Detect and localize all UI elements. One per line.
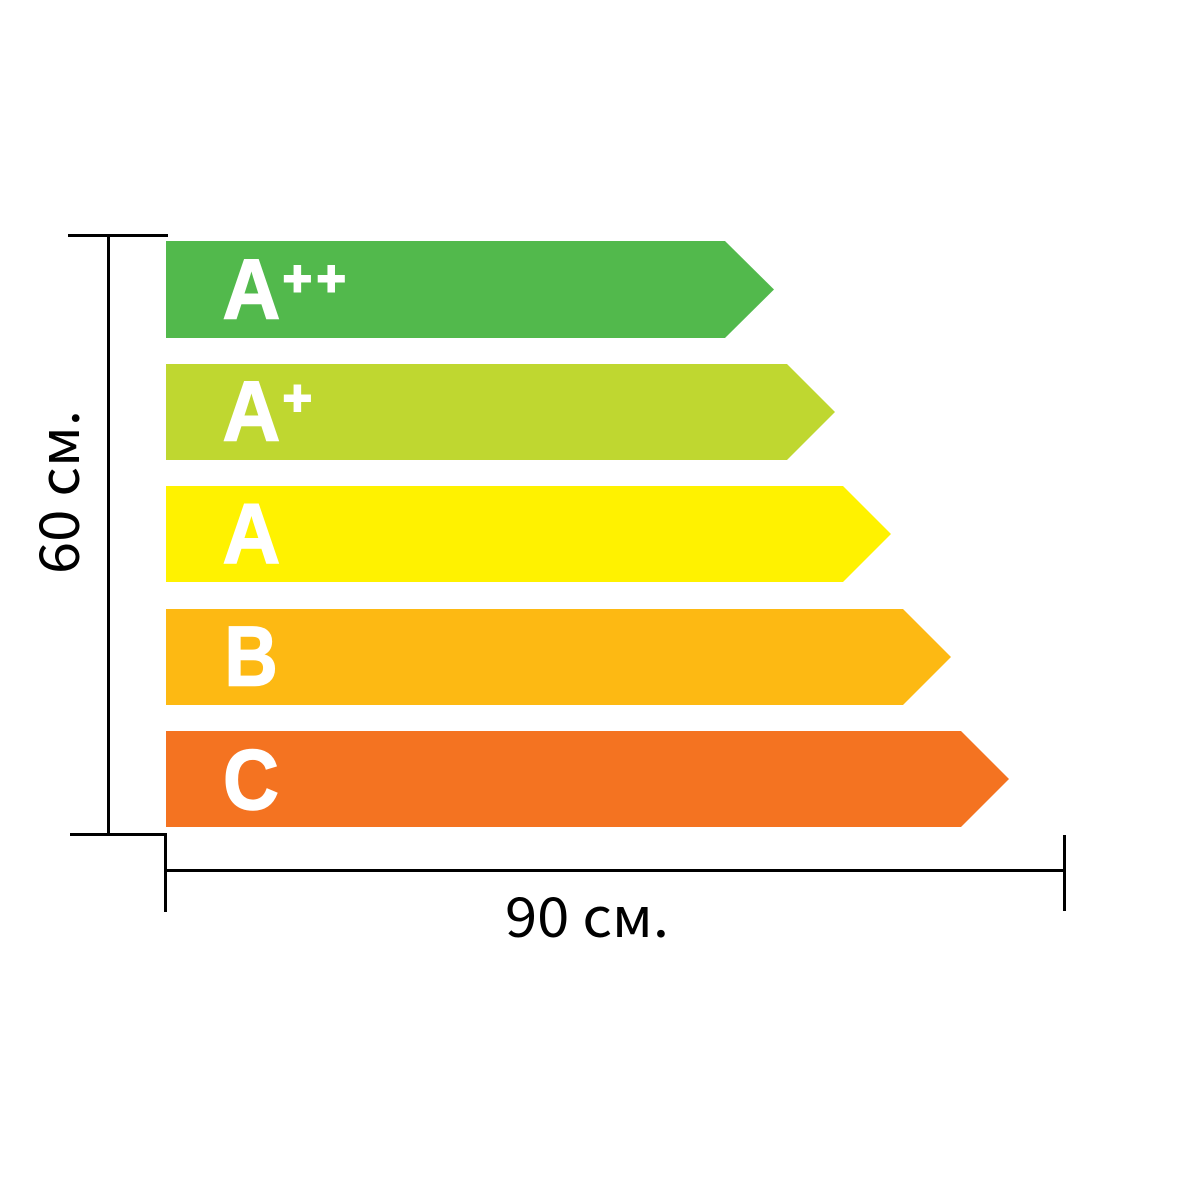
height label: 60 см.	[15, 410, 95, 574]
arrow bar: C	[166, 731, 1009, 828]
arrow bar: A+: +	[283, 370, 312, 426]
arrow bar: A: A	[222, 485, 280, 582]
arrow bar: A+	[166, 363, 835, 460]
arrow bar: A	[166, 485, 891, 582]
arrow bar: A++	[166, 241, 774, 338]
arrow bar: B: B	[224, 608, 278, 704]
width dimension line	[165, 834, 1065, 912]
height dimension line	[68, 235, 168, 834]
arrow bar: C: C	[223, 732, 279, 828]
arrow bar: A++: A	[222, 241, 280, 337]
arrow bar: A++: ++	[283, 251, 351, 307]
width label: 90 см.	[505, 873, 669, 953]
arrow bar: B	[166, 608, 951, 705]
arrow bar: A+: A	[222, 363, 280, 459]
